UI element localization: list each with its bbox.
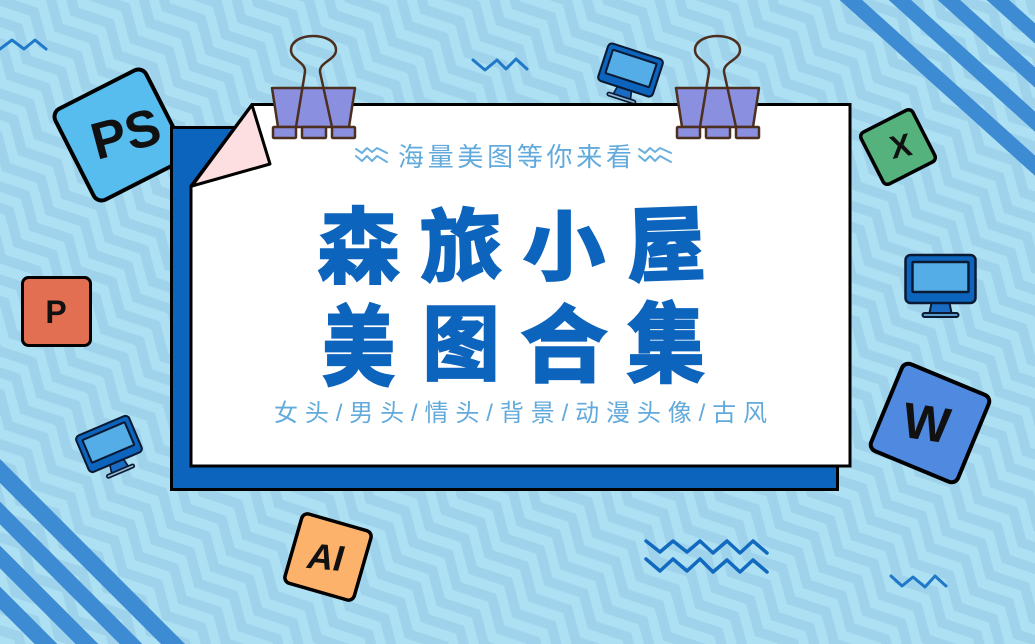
card: blue backing [172,128,838,490]
title: line one: 旅 [418,183,504,299]
icon: P tile: P [45,294,67,330]
icon: X tile: X [887,126,916,166]
title: line two: 美 [322,278,395,404]
title: line two: 集 [627,274,705,400]
category list: 女头/男头/情头/背景/动漫头像/古风 [274,400,767,427]
tagline: 海量美图等你来看 [398,142,632,172]
card: white sheet [191,104,850,466]
icon: W tile [869,362,991,484]
icon: monitor left [75,415,148,484]
icon: PS tile [51,66,189,204]
diagonal stripes: bottom left [0,461,190,644]
small waves: left of tagline [356,148,387,162]
icon: W tile: W [899,392,955,454]
title: line one: 小 [523,187,605,296]
title: line one [317,178,707,300]
small waves: right of tagline [639,148,671,162]
binder clip: right [676,36,759,138]
icon: AI tile: AI [305,535,346,579]
icon: monitor right [906,255,976,317]
icon: PS tile: PS [85,98,167,172]
diagonal stripes: top right [842,0,1035,182]
card: folded corner [192,105,270,186]
binder clip: left [272,36,355,138]
title: line one: 屋 [625,178,707,300]
icon: X tile [859,108,937,186]
title: line two: 合 [521,278,607,400]
wave: top left [0,40,46,49]
icon: monitor top [594,42,664,109]
icon: AI tile [283,512,373,602]
title: line one: 森 [317,181,400,300]
title: line two [322,274,705,404]
wave: bottom right [891,576,946,587]
wave: top middle [473,59,527,70]
icon: P tile [22,278,90,346]
title: line two: 图 [422,278,500,397]
wave: bottom double [646,541,767,572]
